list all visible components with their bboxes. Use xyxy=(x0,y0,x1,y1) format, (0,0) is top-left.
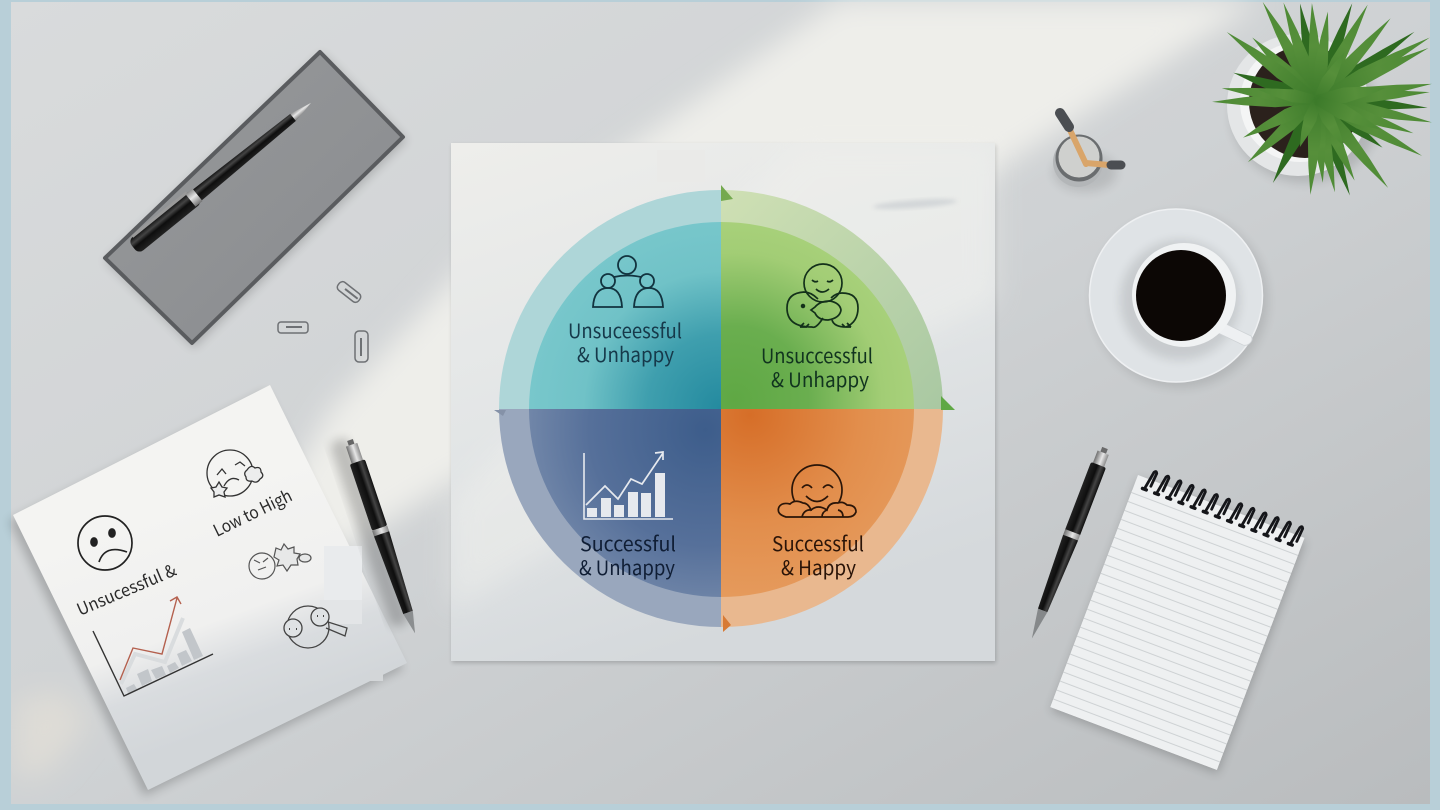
pencils xyxy=(1060,113,1121,165)
middle left pen xyxy=(329,434,423,640)
text: unsuccessful: Unsucessful & xyxy=(72,556,180,621)
label: unsuccessful and unhappy: Unsuccessful xyxy=(761,340,873,369)
icon: growth chart xyxy=(584,452,673,519)
label: successful and unhappy: & Unhappy xyxy=(579,552,676,581)
icon: sad face xyxy=(78,516,132,570)
main paper xyxy=(451,143,996,663)
plant xyxy=(1212,0,1433,198)
label: successful and unhappy: Successful xyxy=(580,528,676,557)
quadrant circle xyxy=(494,185,955,632)
label: unsuccessful and unhappy: Unsuceessful xyxy=(568,315,682,344)
icon: smiling face with clouds xyxy=(778,465,856,517)
chart doodle xyxy=(93,597,213,696)
quadrant: green xyxy=(721,190,943,409)
saucer xyxy=(1090,209,1262,382)
text: low to high: Low to High xyxy=(208,482,296,541)
cycle arrowheads xyxy=(494,185,955,632)
tray with pen xyxy=(105,52,407,348)
label: unsuccessful and unhappy: & Unhappy xyxy=(577,339,675,368)
cup handle xyxy=(1216,322,1252,345)
label: successful and happy: & Happy xyxy=(781,552,857,581)
right pen xyxy=(1024,445,1112,641)
label: successful and happy: Successful xyxy=(772,528,864,557)
left sheet with doodles xyxy=(13,385,407,790)
cup xyxy=(1132,243,1236,347)
quadrant: orange xyxy=(721,409,943,627)
icon: magnifier face xyxy=(284,606,347,648)
quadrant: blue xyxy=(499,409,721,627)
label: unsuccessful and unhappy: & Unhappy xyxy=(771,364,870,393)
notebook xyxy=(1049,466,1310,773)
icon: hugging faces xyxy=(787,264,858,327)
paper clips xyxy=(278,280,368,362)
pencil holder xyxy=(1053,113,1121,192)
icon: people xyxy=(593,256,663,307)
icon: coughing face xyxy=(207,450,263,497)
coffee cup xyxy=(1090,209,1268,388)
icon: angry face burst xyxy=(249,544,311,579)
quadrant: teal xyxy=(499,190,721,409)
leaves xyxy=(1212,0,1433,198)
coffee xyxy=(1136,250,1226,341)
left sheet shadow xyxy=(9,391,403,796)
spiral binding xyxy=(1143,469,1303,546)
tray pen xyxy=(127,95,317,254)
